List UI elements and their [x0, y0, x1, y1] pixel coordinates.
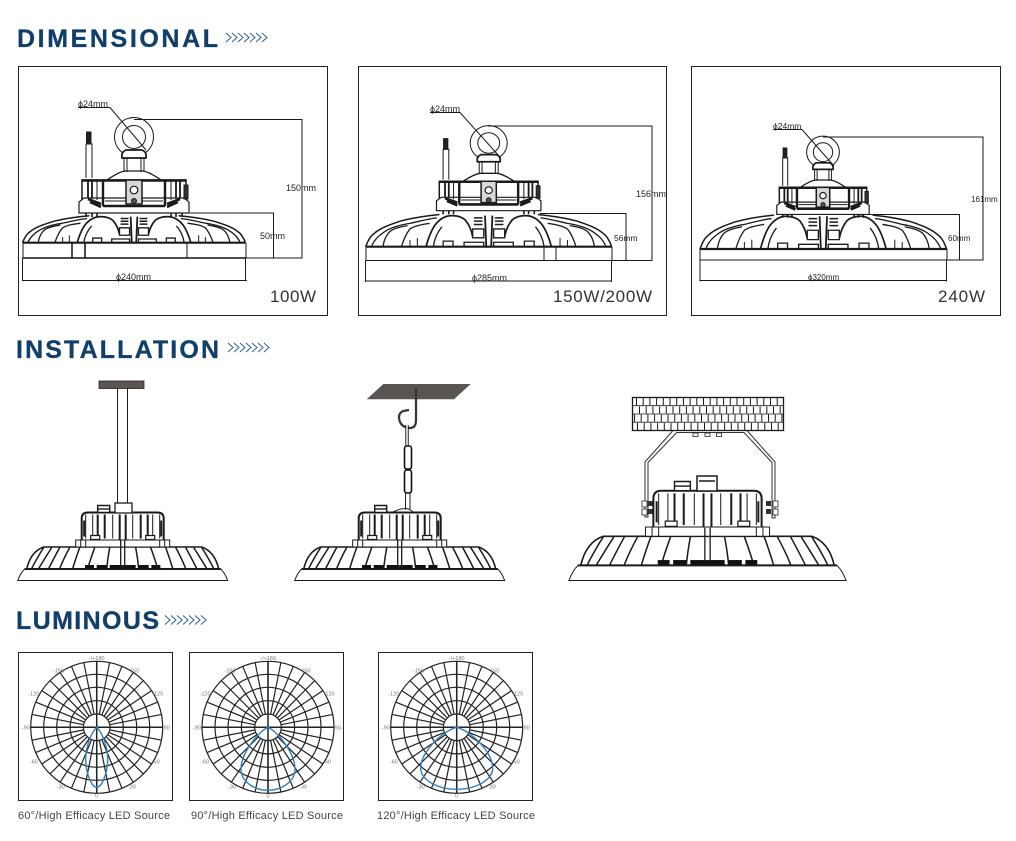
dimension lines 240W	[700, 130, 983, 282]
angle labels: -150	[224, 668, 236, 674]
angle labels: 90	[335, 725, 341, 731]
installation: wall bracket mount	[569, 398, 846, 580]
panel: 240W dimensions	[692, 66, 1000, 316]
heading: luminous: LUMINOUS	[16, 607, 159, 635]
dimension labels 150W/200W	[430, 104, 666, 306]
panel: 150W/200W dimensions	[358, 66, 666, 316]
dimension labels 150W/200W: ϕ285mm	[472, 273, 507, 283]
angle labels: -/+180	[449, 656, 465, 662]
dimension labels 240W: ϕ320mm	[808, 273, 839, 282]
angle labels: 0	[266, 793, 270, 799]
caption 90 degrees: 90°/High Efficacy LED Source	[191, 810, 343, 822]
angle labels: 60	[514, 759, 520, 765]
caption 60 degrees: 60°/High Efficacy LED Source	[18, 810, 170, 822]
angle labels: -60	[30, 759, 38, 765]
dimension labels 150W/200W: 56mm	[614, 233, 638, 243]
installation: chain hook mount	[295, 384, 505, 580]
caption 120 degrees: 120°/High Efficacy LED Source	[377, 810, 535, 822]
angle labels: 30	[301, 784, 307, 790]
dimension labels 240W: ϕ24mm	[773, 121, 801, 131]
angle labels	[193, 656, 341, 799]
dimension lines 100W	[22, 108, 302, 281]
dimension labels 100W	[78, 99, 316, 306]
brick wall	[632, 398, 784, 430]
dimension labels 150W/200W: 150W/200W	[553, 287, 652, 306]
angle labels: 30	[130, 784, 136, 790]
angle labels: -90	[193, 725, 201, 731]
beam curve 60 degrees	[86, 727, 108, 787]
angle labels: 60	[325, 759, 331, 765]
panel: 60 degree polar chart	[18, 652, 172, 800]
beam curve 120 degrees	[421, 727, 493, 789]
panel: 120 degree polar chart	[378, 652, 532, 800]
angle labels: -120	[28, 691, 39, 697]
dimension labels 240W: 240W	[938, 287, 985, 306]
angle labels: 120	[514, 691, 523, 697]
lamp drawing 240W	[700, 136, 947, 260]
dimension labels 240W	[773, 121, 998, 306]
angle labels: -/+180	[260, 656, 276, 662]
dimension labels 100W: 100W	[270, 287, 316, 306]
angle labels: 90	[524, 725, 530, 731]
installation: pole mount	[18, 381, 228, 580]
angle labels: -60	[390, 759, 398, 765]
angle labels: -150	[413, 668, 424, 674]
angle labels: 30	[490, 784, 496, 790]
lamp drawing 150W/200W	[366, 126, 612, 260]
dimension lines 150W/200W	[365, 112, 652, 282]
angle labels: 0	[95, 793, 98, 799]
angle labels: 120	[154, 691, 163, 697]
angle labels: -30	[417, 784, 425, 790]
dimension labels 100W: 50mm	[260, 231, 285, 241]
angle labels: -/+180	[89, 656, 105, 662]
angle labels	[22, 656, 170, 799]
angle labels: -30	[57, 784, 65, 790]
dimension labels 240W: 161mm	[971, 195, 998, 204]
dimension labels 240W: 60mm	[948, 234, 971, 243]
angle labels: -90	[382, 725, 390, 731]
beam curve 90 degrees	[241, 727, 295, 790]
dimension labels 100W: 150mm	[286, 183, 316, 193]
dimension labels 100W: ϕ24mm	[78, 99, 108, 109]
angle labels	[382, 656, 530, 799]
angle labels: -120	[199, 691, 211, 697]
angle labels: 120	[325, 691, 335, 697]
angle labels: -90	[22, 725, 30, 731]
panel: 90 degree polar chart	[190, 652, 344, 800]
angle labels: 150	[130, 668, 139, 674]
angle labels: 60	[154, 759, 160, 765]
angle labels: 150	[490, 668, 499, 674]
angle labels: -150	[53, 668, 64, 674]
lamp drawing 100W	[22, 118, 246, 258]
heading: installation: INSTALLATION	[16, 336, 219, 364]
angle labels: 0	[455, 793, 458, 799]
angle labels: -60	[201, 759, 209, 765]
angle labels: 150	[301, 668, 311, 674]
angle labels: 90	[164, 725, 170, 731]
angle labels: -30	[228, 784, 236, 790]
angle labels: -120	[388, 691, 399, 697]
heading: dimensional: DIMENSIONAL	[17, 25, 218, 53]
dimension labels 100W: ϕ240mm	[116, 272, 151, 282]
dimension labels 150W/200W: 156mm	[636, 189, 666, 199]
panel: 100W dimensions	[18, 66, 328, 316]
dimension labels 150W/200W: ϕ24mm	[430, 104, 460, 114]
